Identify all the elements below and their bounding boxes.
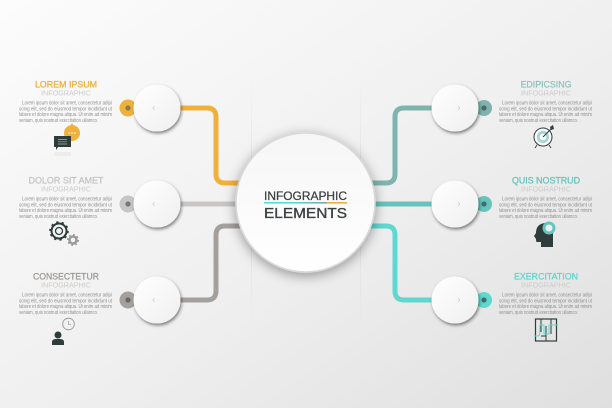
text block: Edipicsing: labore et dolore magna aliqua. Ut enim ad minim	[499, 112, 592, 118]
marker dot: light grey	[120, 196, 136, 212]
text block: Dolor sit amet: scing elit, sed do eiusmod tempor incididunt ut	[19, 202, 113, 208]
text block: Lorem ipsum: scing elit, sed do eiusmod tempor incididunt ut	[19, 106, 113, 112]
icon: gears	[50, 222, 78, 245]
connector: orange	[178, 108, 245, 183]
text block: Edipicsing: EDIPICSING	[520, 80, 572, 90]
text block: Edipicsing: Lorem ipsum dolor sit amet, consectetur adipi	[502, 101, 592, 107]
text block: Edipicsing: INFOGRAPHIC	[521, 88, 571, 98]
icon: target with arrow	[534, 125, 554, 148]
central hub	[236, 133, 375, 272]
knob: left 3	[134, 276, 180, 324]
vertical bands behind the hub	[251, 70, 361, 335]
text block: Dolor sit amet: Lorem ipsum dolor sit amet, consectetur adipi	[22, 197, 112, 203]
marker dot: dark grey	[120, 292, 136, 308]
text block: Exercitation: scing elit, sed do eiusmod tempor incididunt ut	[499, 298, 593, 304]
text block: Quis nostrud: scing elit, sed do eiusmod tempor incididunt ut	[499, 202, 593, 208]
hub title line 2: ELEMENTS	[264, 205, 347, 222]
knob: right 2	[432, 180, 478, 228]
hub title line 1: INFOGRAPHIC	[264, 189, 347, 203]
icon: person with clock bubble	[52, 318, 74, 345]
text block: Consectetur: labore et dolore magna aliqua. Ut enim ad minim	[19, 304, 112, 310]
text block: Lorem ipsum: Lorem ipsum dolor sit amet, consectetur adipi	[22, 101, 112, 107]
text block: Lorem ipsum: LOREM IPSUM	[35, 80, 97, 90]
text block: Dolor sit amet: labore et dolore magna aliqua. Ut enim ad minim	[19, 208, 112, 214]
marker dot: muted teal	[476, 100, 492, 116]
text block: Quis nostrud: Lorem ipsum dolor sit amet, consectetur adipi	[502, 197, 592, 203]
text block: Edipicsing: scing elit, sed do eiusmod tempor incididunt ut	[499, 106, 593, 112]
knob: left 1	[134, 84, 180, 132]
knob: right 1	[432, 84, 478, 132]
text block: Lorem ipsum: INFOGRAPHIC	[41, 88, 91, 98]
marker dot: orange	[120, 100, 136, 116]
text block: Dolor sit amet: DOLOR SIT AMET	[28, 176, 104, 186]
connector: light grey	[178, 202, 245, 206]
text block: Dolor sit amet: veniam, quis nostrud exercitation ullamco.	[19, 214, 98, 220]
text block: Quis nostrud: labore et dolore magna aliqua. Ut enim ad minim	[499, 208, 592, 214]
icon: head with gear	[534, 223, 554, 247]
knob: right 3	[432, 276, 478, 324]
text block: Quis nostrud: QUIS NOSTRUD	[512, 176, 580, 186]
text block: Lorem ipsum: veniam, quis nostrud exercitation ullamco.	[19, 118, 98, 124]
text block: Quis nostrud: INFOGRAPHIC	[521, 184, 571, 194]
text block: Quis nostrud	[499, 176, 593, 220]
text block: Consectetur: CONSECTETUR	[33, 272, 99, 282]
connector: dark grey	[178, 226, 245, 300]
text block: Consectetur: veniam, quis nostrud exercitation ullamco.	[19, 310, 98, 316]
text block: Exercitation	[499, 272, 593, 316]
text block: Exercitation: Lorem ipsum dolor sit amet, consectetur adipi	[502, 293, 592, 299]
text block: Lorem ipsum: labore et dolore magna aliqua. Ut enim ad minim	[19, 112, 112, 118]
text block: Consectetur	[19, 272, 113, 316]
marker dot: teal	[476, 196, 492, 212]
knob: left 2	[134, 180, 180, 228]
text block: Quis nostrud: veniam, quis nostrud exercitation ullamco.	[499, 214, 578, 220]
text block: Exercitation: EXERCITATION	[514, 272, 578, 282]
text block: Dolor sit amet: INFOGRAPHIC	[41, 184, 91, 194]
connector: teal	[366, 202, 434, 206]
text block: Exercitation: labore et dolore magna aliqua. Ut enim ad minim	[499, 304, 592, 310]
marker dot: cyan	[476, 292, 492, 308]
text block: Lorem ipsum	[19, 80, 113, 124]
text block: Exercitation: veniam, quis nostrud exercitation ullamco.	[499, 310, 578, 316]
text block: Consectetur: INFOGRAPHIC	[41, 280, 91, 290]
connector: cyan	[366, 226, 434, 300]
connector: muted teal	[366, 108, 434, 183]
text block: Consectetur: Lorem ipsum dolor sit amet, consectetur adipi	[22, 293, 112, 299]
text block: Consectetur: scing elit, sed do eiusmod tempor incididunt ut	[19, 298, 113, 304]
text block: Edipicsing	[499, 80, 593, 124]
hub rule	[264, 202, 347, 204]
text block: Edipicsing: veniam, quis nostrud exercitation ullamco.	[499, 118, 578, 124]
icon: maze	[534, 319, 558, 341]
text block: Dolor sit amet	[19, 176, 113, 220]
icon: chat bubbles	[54, 123, 80, 156]
text block: Exercitation: INFOGRAPHIC	[521, 280, 571, 290]
